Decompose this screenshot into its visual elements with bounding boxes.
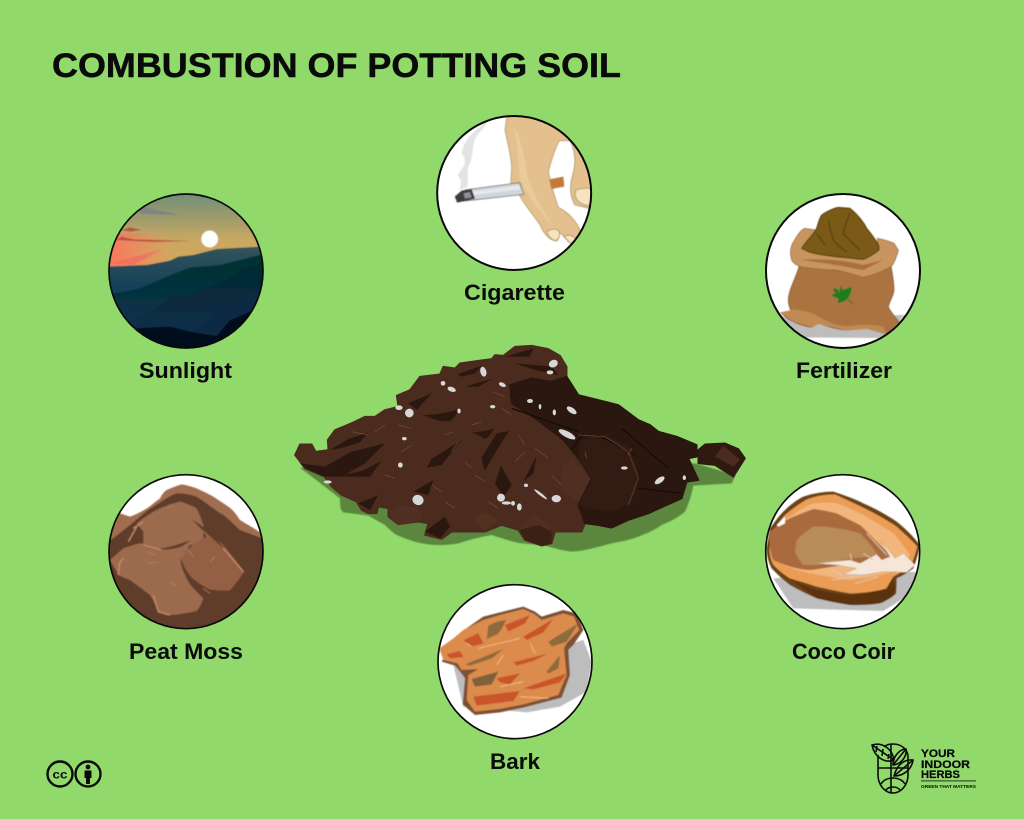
logo icon	[872, 744, 913, 793]
panel: peat moss	[107, 475, 267, 664]
logo: your indoor herbs: GREEN THAT MATTERS	[921, 784, 976, 789]
icon: sunset over mountains	[107, 193, 267, 353]
panel: fertilizer	[766, 194, 920, 383]
icon: hand holding cigarette	[437, 110, 597, 270]
panel: coco coir	[766, 475, 920, 664]
soil shaded right side	[510, 377, 698, 528]
soil main body	[295, 346, 698, 546]
label: fertilizer: Fertilizer	[796, 358, 892, 383]
soil white perlite stones	[324, 358, 686, 511]
logo: your indoor herbs: INDOOR	[921, 759, 970, 771]
icon: creative commons licence: cc	[52, 768, 68, 782]
soil clump highlights and cracks	[300, 348, 740, 546]
logo: your indoor herbs	[872, 744, 976, 793]
panel: sunlight	[107, 193, 267, 383]
logo: your indoor herbs: HERBS	[921, 769, 960, 781]
icon: peat moss mound	[107, 475, 267, 632]
label: bark: Bark	[490, 749, 541, 774]
soil right clump	[698, 443, 745, 477]
icon: fertilizer sack	[766, 194, 920, 348]
icon: piece of bark	[438, 585, 592, 739]
logo wordmark: YOUR	[921, 748, 955, 760]
icon: coconut husk	[766, 475, 920, 629]
label: coco coir: Coco Coir	[792, 639, 895, 664]
panel: bark	[438, 585, 592, 774]
icon: creative commons licence	[48, 762, 100, 786]
label: peat moss: Peat Moss	[129, 639, 243, 664]
label: cigarette: Cigarette	[464, 280, 565, 305]
soil ground shadow	[300, 463, 736, 552]
panel: cigarette	[437, 110, 597, 305]
label: sunlight: Sunlight	[139, 358, 233, 383]
title: COMBUSTION OF POTTING SOIL	[52, 47, 621, 85]
central soil pile	[295, 346, 745, 552]
